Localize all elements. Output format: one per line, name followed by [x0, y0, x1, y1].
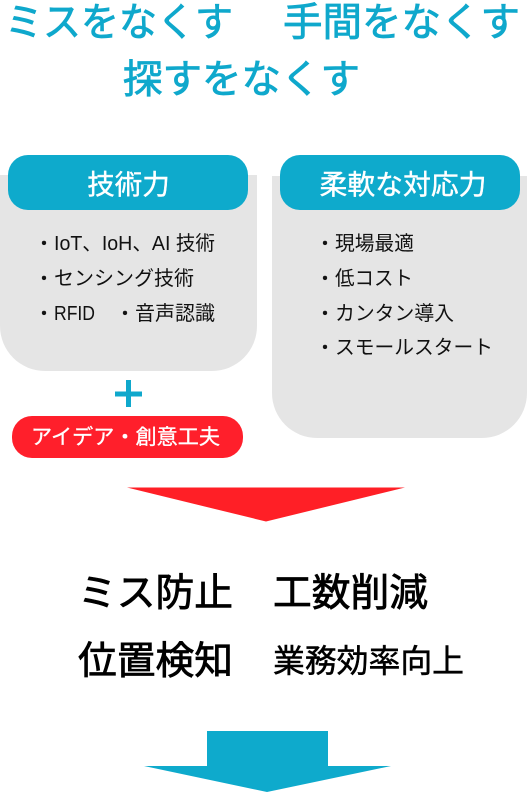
panel: flexibility	[272, 155, 527, 438]
callout: ideas	[12, 416, 243, 458]
outcomes text: ミス防止	[78, 572, 233, 615]
title: ミスをなくす	[5, 1, 233, 45]
list: technology items	[35, 232, 215, 325]
list: flexibility items: 現場最適	[335, 232, 414, 255]
outcomes text: 工数削減	[273, 572, 428, 615]
list: technology items: RFID	[54, 303, 95, 325]
heading: technology: 技術力	[87, 169, 170, 200]
list: flexibility items: ・	[316, 304, 334, 324]
list: technology items: 音声認識	[135, 302, 215, 325]
list: flexibility items: 低コスト	[335, 267, 413, 290]
list: technology items: ・	[116, 304, 134, 324]
list: flexibility items: スモールスタート	[335, 336, 493, 359]
list: technology items: センシング技術	[54, 267, 194, 290]
list: technology items: ・	[35, 234, 53, 254]
list: flexibility items: ・	[316, 338, 334, 358]
title	[5, 1, 520, 102]
callout: ideas: アイデア・創意工夫	[31, 426, 220, 449]
list: technology items: ・	[35, 269, 53, 289]
title: 手間をなくす	[283, 1, 520, 45]
outcomes text: 位置検知	[78, 640, 233, 683]
arrow: red down	[127, 488, 405, 522]
list: flexibility items: カンタン導入	[335, 302, 454, 325]
title: 探すをなくす	[123, 58, 360, 102]
list: flexibility items: ・	[316, 234, 334, 254]
list: flexibility items	[316, 232, 493, 359]
heading: technology	[8, 155, 248, 210]
heading: flexibility: 柔軟な対応力	[320, 169, 486, 200]
icon: plus	[115, 380, 142, 407]
list: technology items: IoT、IoH、AI 技術	[54, 232, 215, 255]
list: flexibility items: ・	[316, 269, 334, 289]
outcomes text	[78, 572, 464, 683]
panel: technology	[0, 155, 257, 371]
heading: flexibility	[280, 155, 520, 210]
outcomes text: 業務効率向上	[273, 643, 464, 679]
arrow: blue down	[144, 731, 391, 792]
list: technology items: ・	[35, 304, 53, 324]
